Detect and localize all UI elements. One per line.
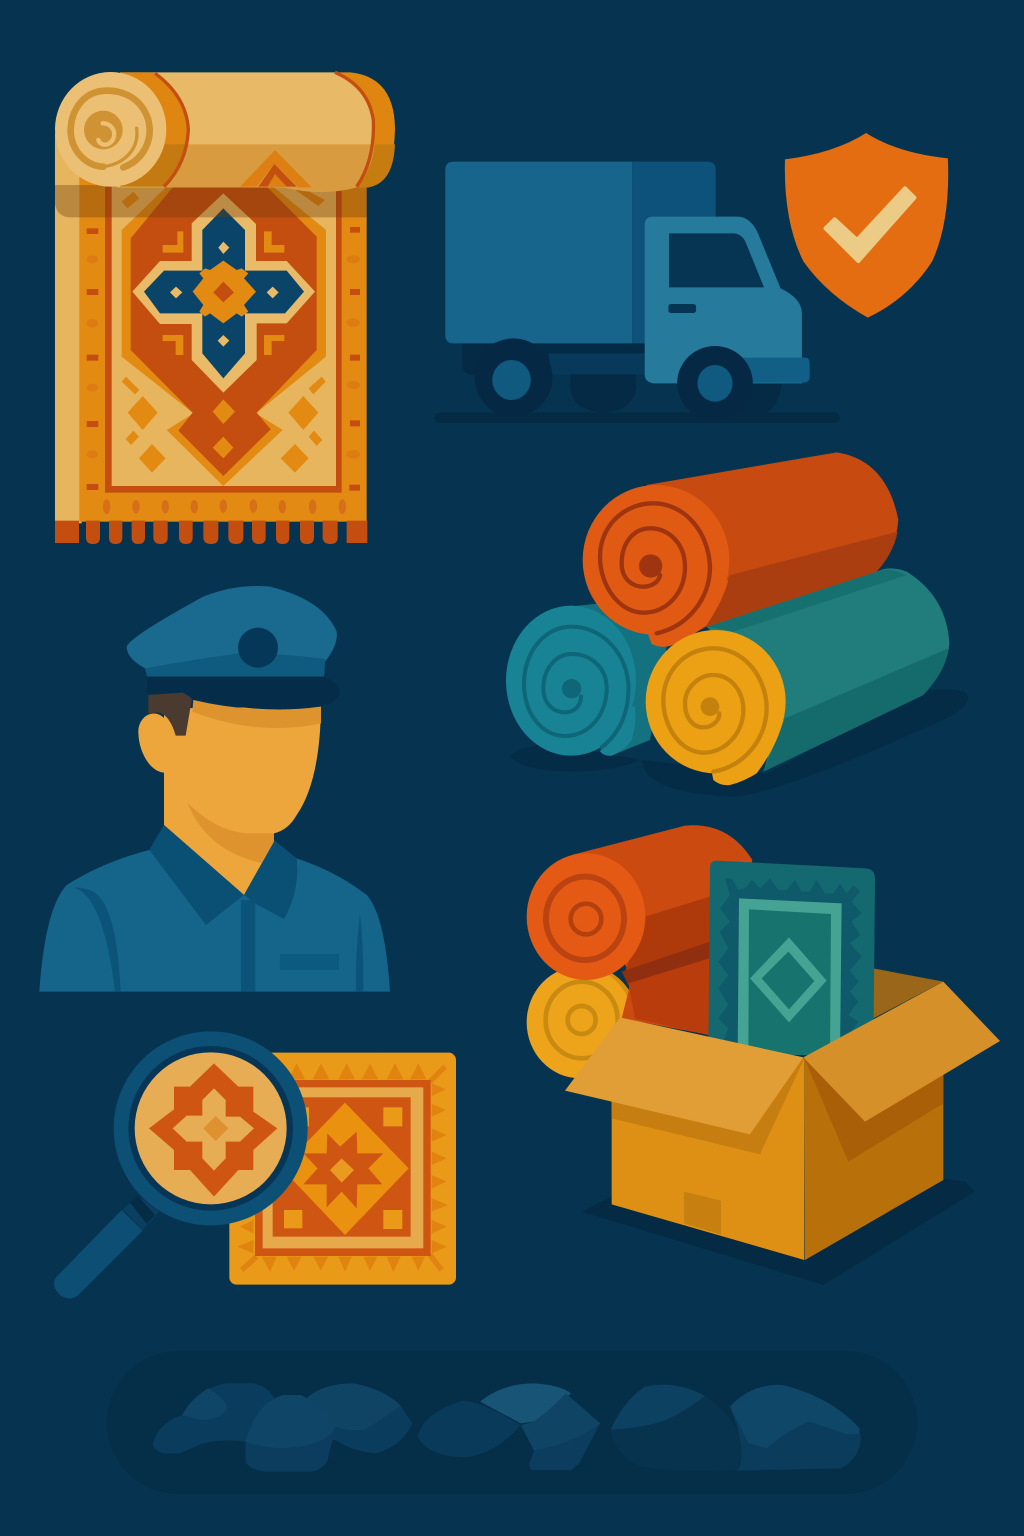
icon: magnifying glass over rug <box>54 1031 456 1298</box>
teal rug in box <box>708 861 875 1055</box>
yellow roll end <box>712 720 783 785</box>
icon: delivery truck with shield <box>434 133 948 423</box>
cardboard box <box>565 982 1000 1260</box>
rug corner diamonds <box>122 192 326 473</box>
teal back roll <box>570 603 667 756</box>
truck frame <box>462 343 645 374</box>
roll shadow on rug <box>55 133 367 217</box>
courier hair <box>148 693 192 736</box>
rug roll <box>55 72 395 192</box>
icon: dark conveyor with rolled lumps <box>107 1351 917 1494</box>
courier shirt <box>39 850 390 992</box>
courier neck and face <box>164 707 321 895</box>
truck cargo box <box>445 162 632 343</box>
orange roll in box <box>527 825 752 1037</box>
yellow roll in box <box>527 965 638 1078</box>
icon: patterned rug with rolled top <box>55 72 395 544</box>
icon: stack of rolled carpets <box>506 452 968 797</box>
icon: open box with rugs <box>527 825 1000 1285</box>
teal front roll <box>707 568 949 772</box>
truck wheels <box>570 374 636 412</box>
orange top roll <box>647 452 898 647</box>
rug fringe <box>55 521 367 544</box>
icon: courier person in uniform <box>39 586 390 992</box>
magnifier lens <box>114 1031 308 1225</box>
square rug <box>229 1053 456 1285</box>
box inner back <box>873 968 943 1018</box>
truck cab <box>645 217 802 383</box>
magnifier handle <box>54 1196 159 1298</box>
courier cap <box>127 586 340 710</box>
rug medallion cross <box>132 193 315 393</box>
rug medallion frame <box>122 187 326 486</box>
courier collar <box>149 825 244 925</box>
shield with check <box>785 133 948 318</box>
